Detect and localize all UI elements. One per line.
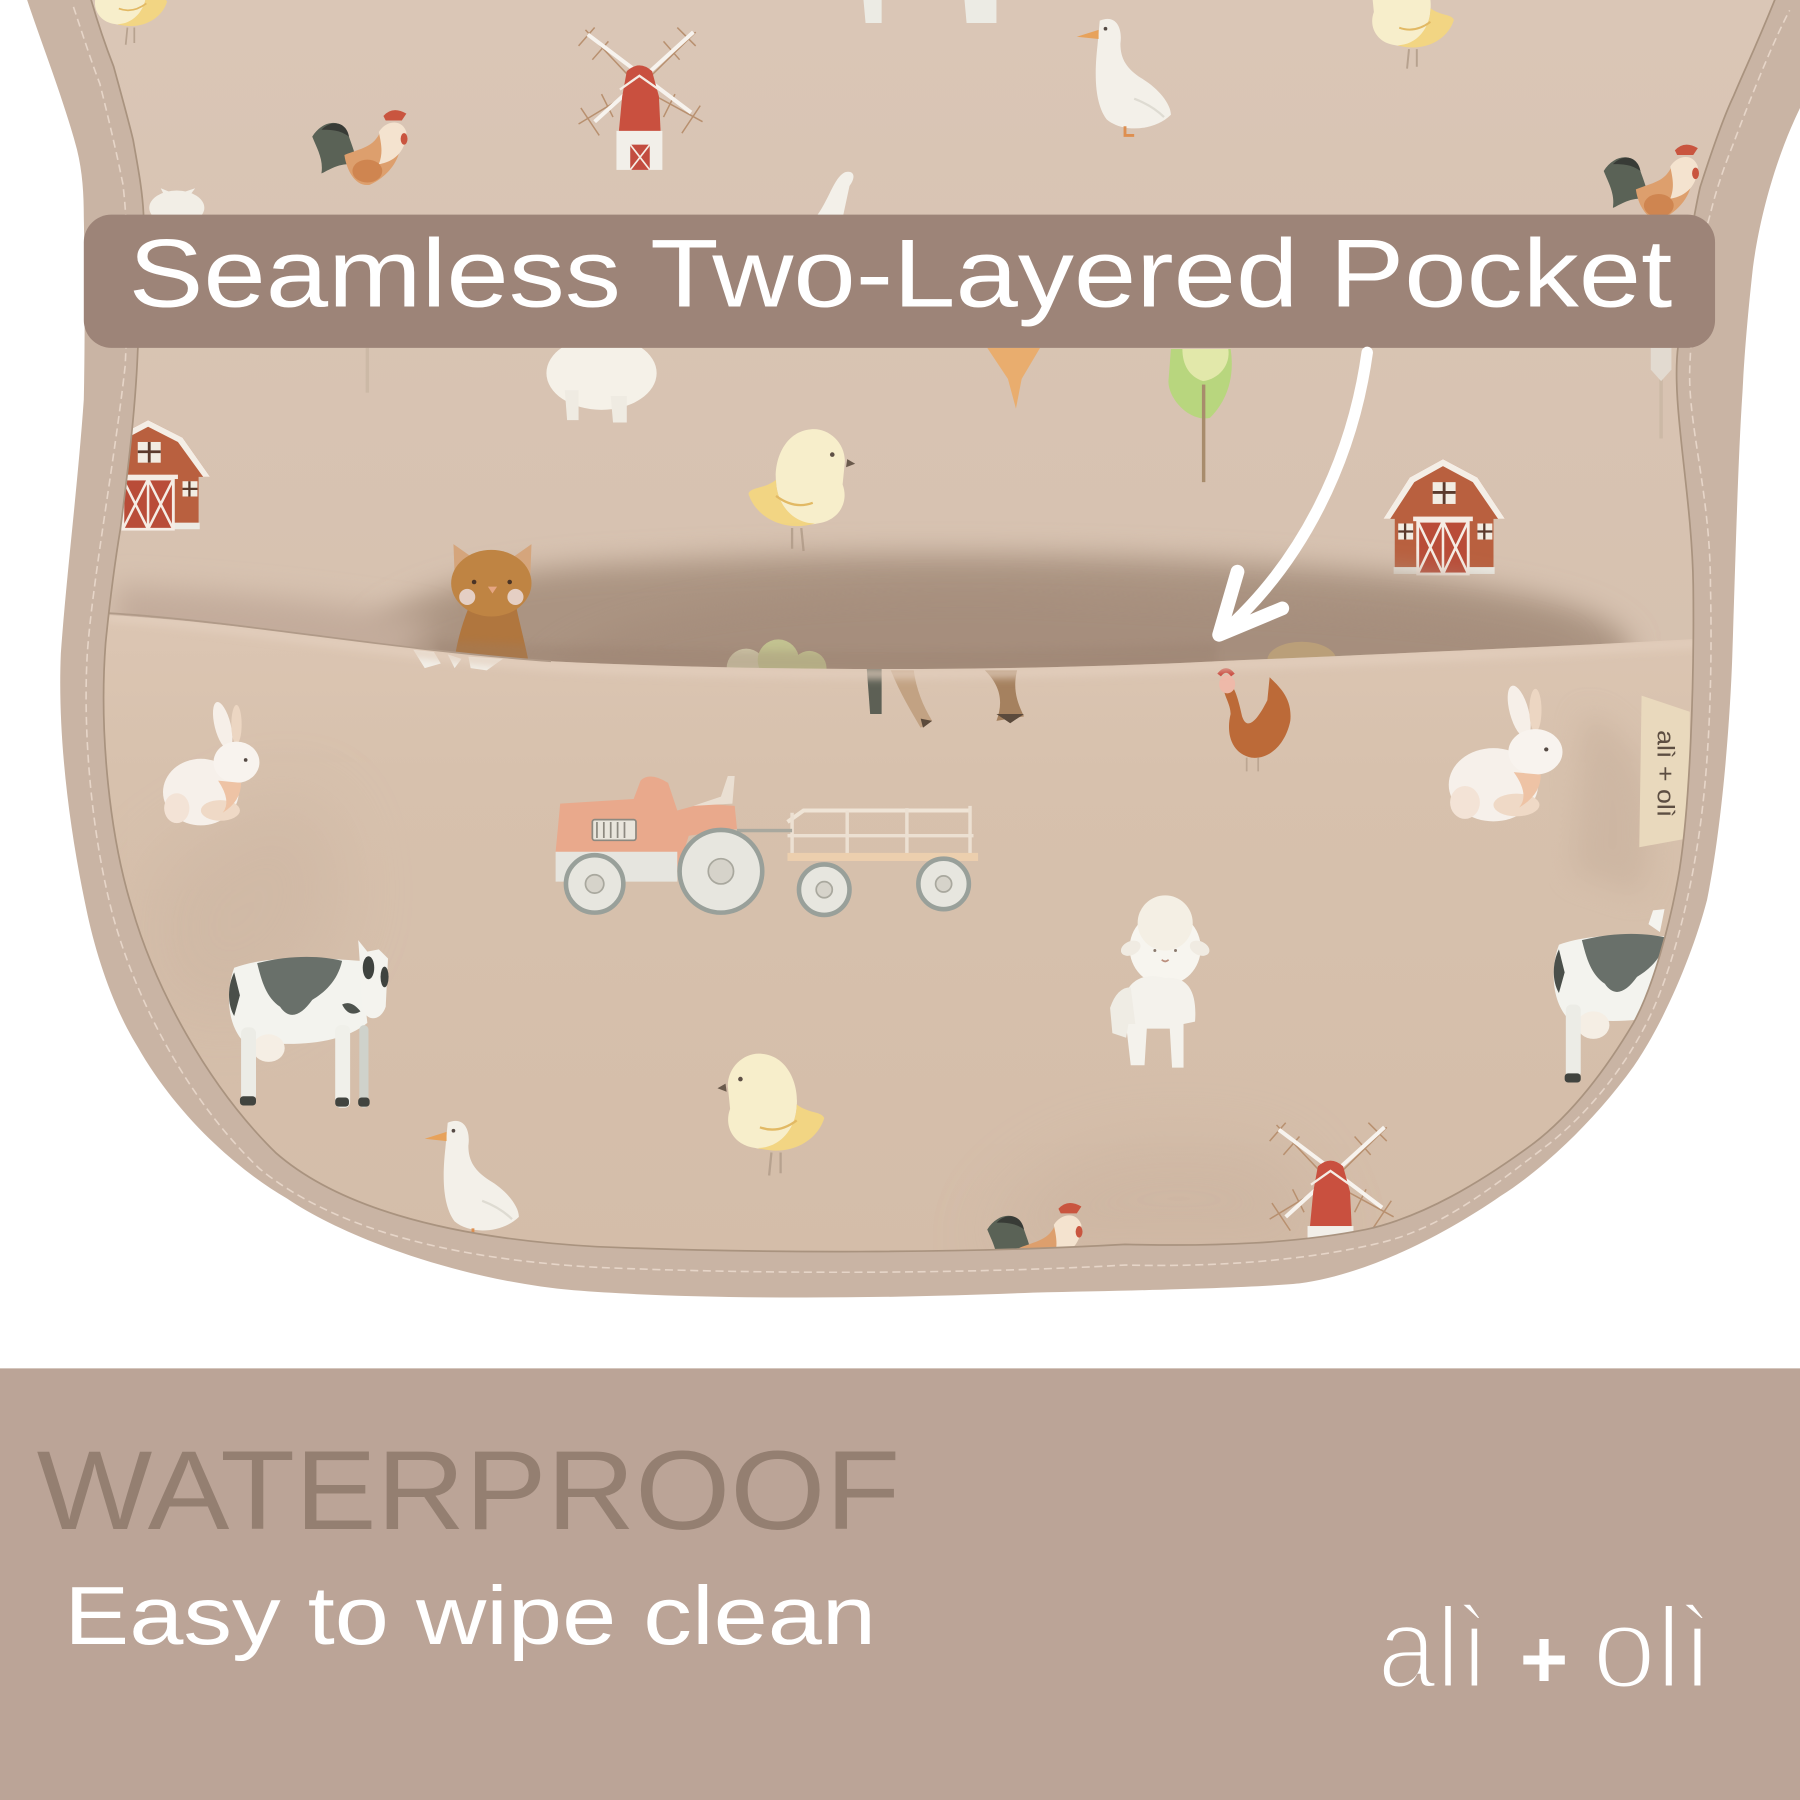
heading: waterproof: WATERPROOF [37,1428,900,1553]
pocket shadow [115,554,1630,689]
horse legs [867,668,1024,728]
callout pill heading: Seamless Two-Layered Pocket [129,220,1672,328]
barn right [1383,459,1505,574]
lip shadow line [106,613,551,661]
lamb [1110,895,1212,1068]
sheep peek [149,188,204,215]
arrow to pocket [1219,352,1367,635]
logo: alì [1378,1584,1489,1712]
cow left [229,940,389,1108]
subheading: Easy to wipe clean [64,1570,876,1662]
cow right ear [1648,909,1665,932]
chick top left [87,0,167,45]
fold shading [149,712,1650,1251]
bib binding outer edge [25,0,1800,1298]
binding seam line [90,0,1777,1252]
goose peek [818,172,854,215]
rooster left [312,110,408,185]
lip highlight [106,616,1699,674]
sheep side [546,348,657,422]
label tag: alì + olì [1652,730,1679,817]
logo [1378,1584,1713,1712]
shadow above pocket lip [456,643,826,669]
tractor and trailer [556,776,978,915]
windmill top [579,28,703,170]
carrot [987,348,1040,409]
hen [1219,670,1291,771]
bib product illustration [25,0,1800,1298]
cat [451,544,532,659]
windmill bottom [1270,1123,1394,1265]
tree [1168,349,1232,482]
rabbit right [1449,684,1563,821]
rooster bottom [987,1203,1083,1278]
footer band [0,1368,1800,1800]
label tag [1639,696,1690,847]
goose lower [425,1121,519,1238]
front pocket with print [69,608,1745,1278]
chick lower [717,1054,824,1176]
rabbit left [163,700,259,825]
bush [726,639,826,669]
hay [1268,642,1335,659]
logo: olì [1592,1585,1713,1713]
stitching [73,7,1790,1272]
chick top right [1363,0,1454,69]
barn left [121,420,210,530]
logo: + [1520,1613,1568,1706]
goose top [1077,19,1171,135]
chick center [748,429,855,551]
tractor wheels [566,830,969,915]
fork head [1651,348,1671,381]
flowers by cat [413,650,503,670]
animal legs top [863,0,996,23]
fine stems [367,348,1661,439]
cow right [1554,934,1664,1082]
rooster right [1604,145,1699,219]
back panel with print [69,0,1800,706]
